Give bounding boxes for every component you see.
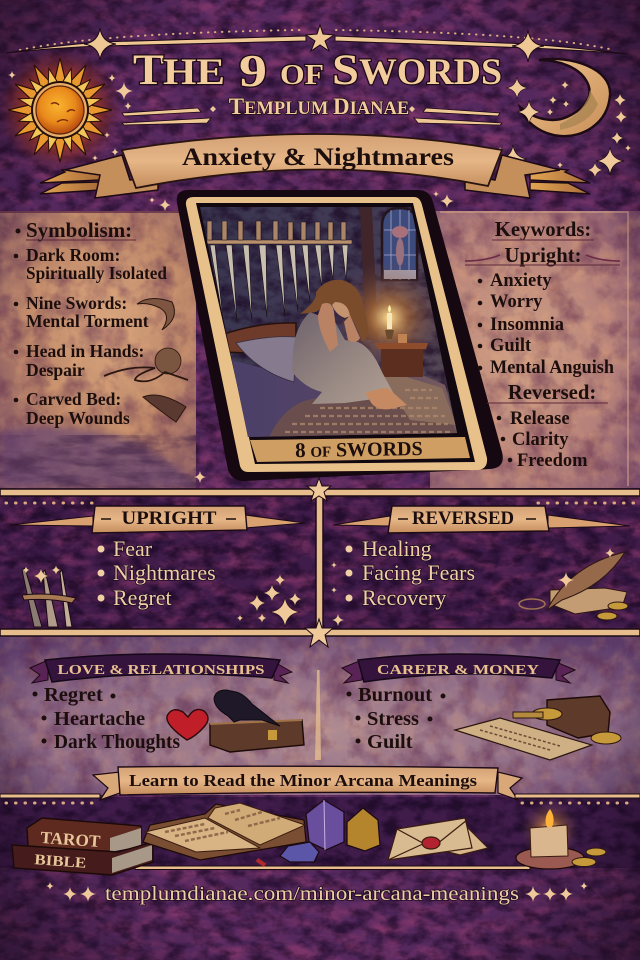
bed (232, 360, 457, 437)
icon: stacked books (12, 818, 153, 875)
heading: symbolism: Symbolism: (26, 218, 132, 242)
title: WORDS (359, 52, 502, 93)
icon: head wrap (104, 348, 188, 381)
icon: stacked books: TAROT (40, 828, 102, 851)
item: head in hands: Head in Hands: (26, 341, 144, 361)
banner: upright: UPRIGHT (122, 508, 217, 529)
banner: learn to read: Learn to Read the Minor Arcana Meanings (129, 771, 477, 790)
upright items: Guilt (490, 336, 532, 356)
upright items: Anxiety (490, 271, 552, 291)
reversed items: Clarity (512, 430, 569, 450)
nightstand (375, 334, 428, 377)
icon: chest, letter and coins (455, 696, 621, 760)
subtitle: Templum Dianae (122, 94, 502, 125)
item: carved bed: Carved Bed: (26, 389, 121, 409)
icon: raven on chest (210, 690, 304, 752)
item: dark room: Dark Room: (26, 245, 120, 265)
icon: crossed swords (22, 568, 76, 627)
banner: Anxiety and Nightmares: Anxiety & Nightmares (182, 144, 454, 171)
icon: stacked books: BIBLE (34, 852, 87, 872)
footer rules (0, 794, 640, 870)
candle glow (339, 265, 435, 366)
upright items: Mental Anguish (490, 358, 615, 378)
panel: upright and reversed band (0, 491, 640, 632)
stained glass window (382, 208, 417, 280)
list: love: Heartache (54, 708, 145, 730)
list: reversed meanings: Facing Fears (362, 560, 475, 585)
icon: candle on dish (516, 800, 606, 869)
card name plate (250, 436, 470, 462)
upright items: Worry (490, 292, 543, 312)
icon: sun (0, 48, 122, 172)
title: S (332, 47, 359, 94)
item: nine swords: Nine Swords: (26, 293, 127, 313)
candle (385, 305, 394, 339)
banner: love and relationships (30, 654, 292, 683)
list: career: Burnout (358, 684, 432, 706)
item: head in hands (14, 341, 144, 380)
card outer frame (177, 190, 503, 481)
list: reversed meanings: Recovery (362, 585, 446, 610)
list: career: Stress (367, 708, 419, 730)
banner: reversed (333, 506, 630, 533)
subtitle: Templum Dianae: TEMPLUM DIANAE (229, 94, 409, 119)
list: love: Regret (44, 684, 103, 706)
list: upright meanings: Fear (113, 536, 153, 561)
panel: symbolism parchment (0, 211, 200, 488)
sparkles near sun (8, 71, 133, 180)
list: upright meanings: Regret (113, 585, 172, 610)
list: upright meanings (98, 536, 216, 610)
heading: upright keywords (465, 245, 620, 267)
title: HE (163, 52, 225, 93)
panel: keywords parchment (430, 211, 640, 488)
heading: reversed keywords: Reversed: (508, 382, 596, 404)
card inner frame (196, 203, 475, 464)
title (133, 45, 502, 96)
banner: career and money: CAREER & MONEY (377, 663, 539, 678)
title: T (133, 47, 164, 94)
list: upright meanings: Nightmares (113, 560, 216, 585)
banner: Anxiety and Nightmares (40, 134, 590, 198)
sparkles beside card (149, 191, 454, 483)
banner: love and relationships: LOVE & RELATIONSHIPS (58, 663, 265, 678)
list: love (32, 684, 180, 753)
pillow (236, 337, 296, 382)
panel: love and career band (0, 635, 640, 795)
item: dark room (14, 245, 167, 283)
woman (292, 280, 407, 409)
title: OF (280, 59, 324, 91)
icon: bandaged sword (137, 298, 174, 330)
list: career (346, 684, 446, 753)
carved headboard (224, 323, 296, 355)
item: nine swords (14, 293, 149, 331)
item: carved bed: Deep Wounds (26, 408, 130, 428)
reversed items: Release (510, 409, 570, 429)
keywords list (465, 219, 620, 471)
card name plate: 8 OF SWORDS (295, 436, 423, 462)
nine swords (205, 221, 352, 322)
banner: learn to read (93, 766, 522, 800)
banner: upright (10, 506, 305, 533)
reversed items (497, 409, 588, 471)
item: nine swords: Mental Torment (26, 311, 149, 331)
list: reversed meanings: Healing (362, 536, 432, 561)
card cream border (186, 197, 487, 472)
icon: sealed envelope (388, 818, 488, 860)
upright items (478, 271, 615, 378)
reversed items: Freedom (517, 451, 588, 471)
icon: heart (167, 709, 208, 740)
banner: reversed: REVERSED (412, 508, 514, 529)
icon: carved wood (143, 395, 186, 422)
item: head in hands: Despair (26, 360, 85, 380)
upright items: Insomnia (490, 315, 564, 335)
icon: crystals (280, 800, 380, 862)
sparkles: upright corner (22, 565, 302, 627)
heading: keywords: Keywords: (495, 219, 591, 241)
website url (46, 882, 588, 905)
symbolism list (14, 218, 167, 428)
header ornament rule (6, 25, 628, 62)
list: reversed meanings (346, 536, 475, 610)
list: career: Guilt (367, 731, 413, 753)
icon: quill and book (519, 552, 628, 620)
icon: open book (143, 803, 306, 867)
list: love: Dark Thoughts (54, 731, 180, 753)
item: carved bed (14, 389, 130, 428)
banner: career and money (342, 654, 575, 683)
website url: templumdianae.com/minor-arcana-meanings (105, 883, 519, 905)
sparkles near moon (496, 77, 632, 178)
item: dark room: Spiritually Isolated (26, 263, 167, 283)
tarot card (177, 190, 503, 481)
panel: footer band (0, 797, 640, 868)
title: 9 (239, 45, 267, 96)
sparkles: reversed corner (331, 548, 615, 626)
icon: crescent moon (520, 59, 610, 136)
heading: upright keywords: Upright: (504, 245, 582, 267)
card art (200, 207, 457, 437)
section dividers (0, 478, 640, 803)
